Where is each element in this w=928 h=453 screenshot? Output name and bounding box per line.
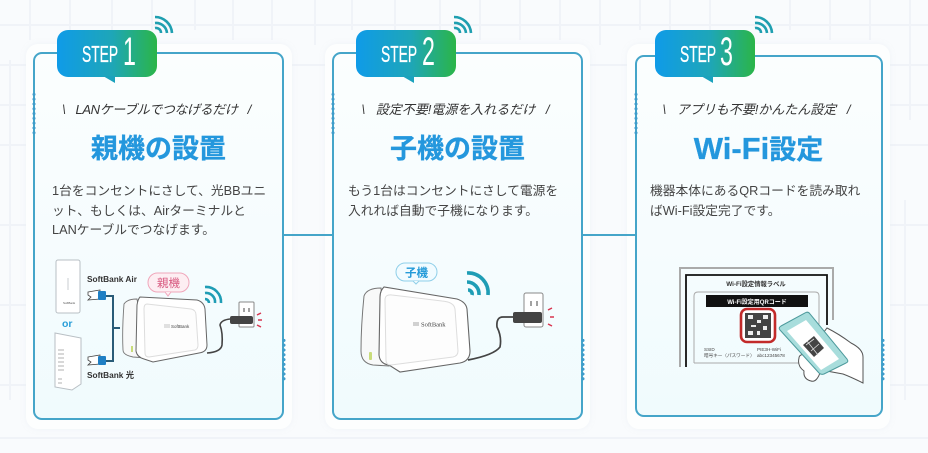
label sheet: Wi-Fi設定情報ラベル [726, 279, 786, 288]
plug spark marks [548, 308, 554, 326]
extender device: SoftBank [421, 322, 446, 328]
step badge [655, 30, 755, 77]
speech bubble: child [396, 263, 437, 284]
panel: step 1 [32, 16, 286, 420]
left dotted accent [331, 92, 335, 136]
LAN cable [88, 290, 120, 365]
card frame [635, 55, 883, 417]
connector line: step 2 to 3 [582, 234, 636, 236]
speech bubble: parent: 親機 [157, 277, 180, 290]
heading: 親機の設置 [91, 134, 226, 164]
step badge [57, 30, 157, 77]
card halo: step 3 [627, 44, 890, 429]
right dotted accent [282, 338, 286, 382]
label: SoftBank Air: SoftBank Air [87, 274, 138, 284]
label sheet: abc12345678 [757, 353, 785, 358]
subtitle: \ LANケーブルでつなげるだけ / [62, 102, 251, 117]
right dotted accent [581, 338, 585, 382]
connector line: step 1 to 2 [283, 234, 333, 236]
router: SoftBank [171, 324, 190, 329]
illustration: extender [360, 262, 554, 373]
right dotted accent [881, 338, 885, 382]
label: or: or [62, 318, 72, 330]
label sheet [680, 268, 833, 367]
label sheet: Wi-Fi設定用QRコード [727, 298, 787, 306]
label sheet: SSID [704, 347, 715, 352]
step badge: STEP [82, 41, 118, 67]
plug spark marks [257, 313, 262, 327]
step badge: 1 [123, 30, 136, 74]
heading: 子機の設置 [390, 134, 525, 164]
illustration: QR label scan [679, 267, 864, 384]
step badge: 3 [720, 30, 733, 74]
label: SoftBank Hikari: SoftBank 光 [87, 370, 135, 380]
card halo: step 2 [325, 44, 590, 429]
body text: LANケーブルでつなげます。 [52, 222, 215, 237]
illustration: router connection [54, 260, 262, 390]
speech bubble: child: 子機 [405, 266, 428, 280]
label sheet: 暗号キー（パスワード） [704, 352, 755, 359]
subtitle: \ 設定不要!電源を入れるだけ / [361, 102, 550, 117]
left dotted accent [634, 92, 638, 136]
icon: wifi signal [205, 287, 221, 303]
panel: step 2 [332, 16, 584, 420]
heading: Wi-Fi設定 [694, 131, 823, 166]
step badge [356, 30, 456, 77]
outlet and plug [468, 293, 543, 360]
body text [650, 183, 860, 218]
speech bubble: parent [148, 273, 189, 296]
subtitle: \ アプリも不要!かんたん設定 / [662, 102, 851, 117]
SoftBank Air device [56, 260, 80, 313]
step badge: 2 [422, 30, 435, 74]
extender device [361, 287, 470, 372]
SoftBank Hikari device [55, 333, 81, 390]
outlet and plug [207, 302, 254, 353]
body text: ット、もしくは、Airターミナルと [52, 203, 246, 218]
left dotted accent [32, 92, 36, 136]
panel: step 3 [634, 16, 884, 417]
body text [348, 183, 558, 218]
icon: wifi above badge [454, 16, 472, 34]
card frame [33, 52, 284, 420]
router [123, 297, 207, 362]
icon: wifi above badge [754, 16, 774, 34]
hand and smartphone [779, 312, 863, 383]
body text: もう1台はコンセントにさして電源を [348, 183, 558, 198]
body text [52, 183, 266, 237]
body text: 入れれば自動で子機になります。 [348, 203, 538, 218]
card halo: step 1 [26, 44, 292, 429]
label sheet: PIE3H-WiFi [757, 347, 781, 352]
SoftBank Air device: SoftBank [63, 301, 76, 305]
QR code highlighted [741, 309, 775, 342]
body text: 機器本体にあるQRコードを読み取れ [650, 183, 860, 198]
icon: wifi signal [467, 273, 488, 295]
body text: ばWi-Fi設定完了です。 [650, 203, 780, 218]
icon: wifi above badge [154, 16, 174, 34]
body text: 1台をコンセントにさして、光BBユニ [52, 183, 266, 198]
step badge: STEP [680, 41, 716, 67]
card frame [332, 52, 583, 420]
step badge: STEP [381, 41, 417, 67]
